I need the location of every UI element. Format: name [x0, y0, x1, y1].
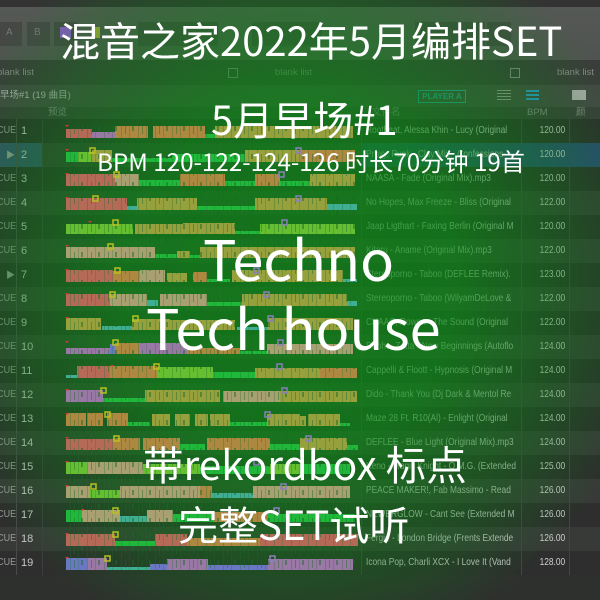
- panel: top toolbar: [0, 0, 600, 60]
- track table: 124.00: [539, 365, 565, 376]
- toolbar buttons: [0, 22, 511, 46]
- track table: 9: [21, 317, 27, 329]
- track table: ▶: [6, 150, 15, 160]
- info line: BPM and duration: BPM 120-122-124-126 时长70分钟 19首: [97, 143, 525, 178]
- track table: 4: [21, 197, 27, 209]
- track table: 8: [21, 293, 27, 305]
- track table: 6: [21, 245, 27, 257]
- track table: 126.00: [539, 485, 565, 496]
- panel: playlist heading bar: 早场#1 (19 曲目): [0, 90, 71, 101]
- track table: Fergie - London Bridge (Frents Extende: [366, 533, 513, 544]
- panel: playlist heading bar: PLAYER A: [422, 92, 462, 101]
- track table: ▶: [6, 270, 15, 280]
- track table: 124.00: [539, 437, 565, 448]
- panel: playlist heading bar: [0, 85, 600, 107]
- track table: 120.00: [539, 125, 565, 136]
- track table: No Hopes, Max Freeze - Bliss (Original: [366, 197, 511, 208]
- toolbar buttons: B: [34, 27, 41, 38]
- track table: Icona Pop, Charli XCX - I Love It (Vand: [366, 557, 511, 568]
- track table: NEWERGLOW - Cant See (Extended M: [366, 509, 515, 520]
- table column header: [0, 107, 600, 119]
- track table: 124.00: [539, 341, 565, 352]
- track table: [0, 119, 600, 575]
- table column header: BPM: [527, 107, 548, 118]
- track table: 120.00: [539, 173, 565, 184]
- track table: 11: [21, 365, 32, 377]
- track table: Stereoporno - Taboo (WilyamDeLove &: [366, 293, 511, 304]
- track table: 15: [21, 461, 33, 473]
- track table: CHAAC, Rowen - The Sound (Original: [366, 317, 508, 328]
- track table: 120.00: [539, 221, 565, 232]
- track table: 12: [21, 389, 33, 401]
- track table: Rootbeat, Alessa Khin - Lucy (Original: [366, 125, 507, 136]
- table column header: 颜: [576, 107, 586, 118]
- track table: 3: [21, 173, 27, 185]
- track table: 7: [21, 269, 27, 281]
- table column header: 预览: [48, 107, 67, 118]
- track table: 126.00: [539, 533, 565, 544]
- title: 混音之家2022年5月编排SET: [60, 10, 562, 68]
- track table: 17: [21, 509, 33, 521]
- track table: PEACE MAKER!, Fab Massimo - Read: [366, 485, 511, 496]
- track table: 5: [21, 221, 27, 233]
- track table: 10: [21, 341, 33, 353]
- track table: 124.00: [539, 413, 565, 424]
- track table: Cappelli & Floott - Hypnosis (Original M: [366, 365, 512, 376]
- track table: DEFLEE - Blue Light (Original Mix).mp3: [366, 437, 514, 448]
- track table: 1: [21, 125, 27, 137]
- track table: Dubhe, Zetta - New Beginnings (Autoflo: [366, 341, 513, 352]
- track table: 16: [21, 485, 33, 497]
- track table: Proxy, Punk - Clay Mix - Confessions: [366, 149, 503, 160]
- track table: 2: [21, 149, 27, 161]
- track table: NAASA - Fade (Original Mix).mp3: [366, 173, 491, 184]
- track table: 14: [21, 437, 33, 449]
- track table: 122.00: [539, 317, 565, 328]
- heading: Tech house: Tech house: [146, 286, 441, 367]
- panel: playlist tabs bar: blank list: [275, 67, 312, 78]
- subtitle: set name: 5月早场#1: [211, 89, 398, 147]
- track table: 18: [21, 533, 33, 545]
- toolbar buttons: A: [6, 27, 13, 38]
- track table: 125.00: [539, 461, 565, 472]
- track table: 123.00: [539, 269, 565, 280]
- track table: 13: [21, 413, 33, 425]
- track table: Kitaru - Aname (Original Mix).mp3: [366, 245, 492, 256]
- track table: Keno - Magic Knight - O.M.G. (Extended: [366, 461, 516, 472]
- track table: 124.00: [539, 389, 565, 400]
- track table: 128.00: [539, 557, 565, 568]
- text: full set preview: 完整SET试听: [178, 494, 409, 552]
- panel: playlist tabs bar: blank list: [557, 67, 594, 78]
- track table: 19: [21, 557, 33, 569]
- text: rekordbox cue points: 带rekordbox 标点: [143, 433, 467, 492]
- track table: 122.00: [539, 245, 565, 256]
- track table: 122.00: [539, 293, 565, 304]
- track table: 122.00: [539, 197, 565, 208]
- track table: Maze 28 Ft. R10(Al) - Enlight (Original: [366, 413, 508, 424]
- track table: 120.00: [539, 149, 565, 160]
- heading: Techno: Techno: [203, 217, 394, 298]
- table column header: 文件名: [372, 107, 401, 118]
- track table: Jaap Ligthart - Faxing Berlin (Original M: [366, 221, 514, 232]
- track table: 126.00: [539, 509, 565, 520]
- track table: Stereoporno - Taboo (DEFLEE Remix).: [366, 269, 511, 280]
- panel: playlist tabs bar: [0, 60, 600, 85]
- track table: Dido - Thank You (Dj Dark & Mentol Re: [366, 389, 511, 400]
